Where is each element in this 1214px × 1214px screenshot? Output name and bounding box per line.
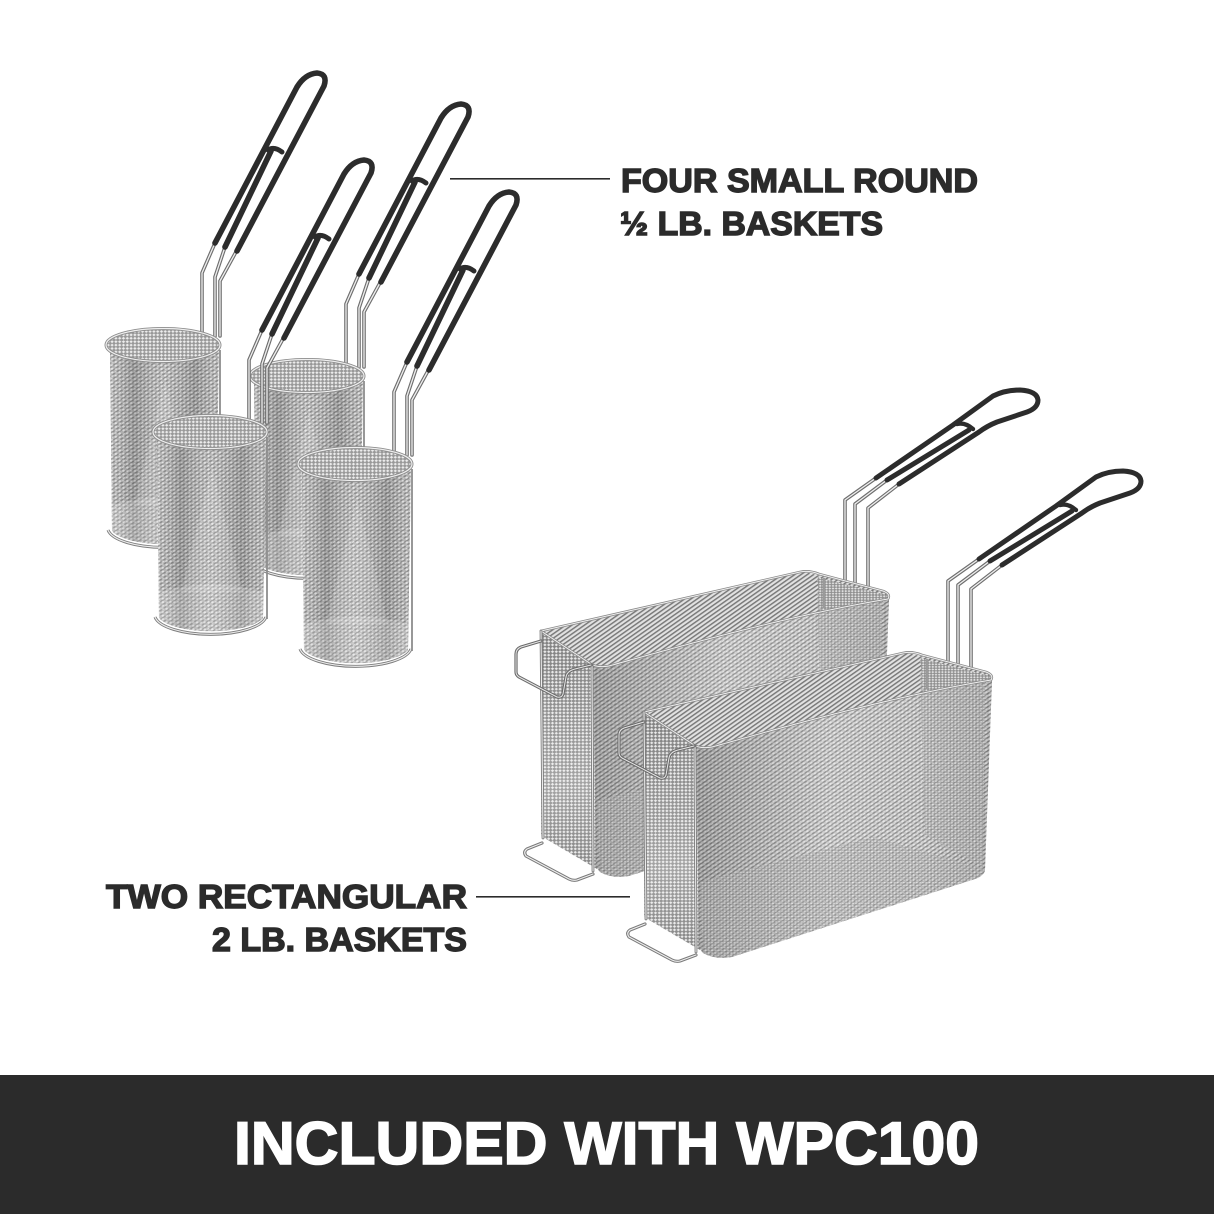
front rectangular basket — [619, 471, 1141, 961]
callout: rectangular baskets: TWO RECTANGULAR — [106, 878, 467, 915]
callout: round baskets: ½ LB. BASKETS — [620, 205, 883, 242]
handle — [346, 104, 469, 367]
callout: rectangular baskets — [106, 878, 467, 958]
leader line: rectangular baskets — [476, 896, 630, 898]
image: two rectangular baskets — [516, 390, 1141, 961]
back rectangular basket — [516, 390, 1038, 880]
mesh body — [153, 416, 267, 634]
handle — [394, 192, 517, 455]
footer band — [0, 1075, 1214, 1214]
leader line: round baskets — [450, 178, 610, 180]
footer title: INCLUDED WITH WPC100 — [234, 1110, 979, 1177]
back-left round basket — [106, 73, 325, 547]
mesh body — [619, 652, 992, 961]
callout: round baskets: FOUR SMALL ROUND — [621, 162, 978, 199]
mesh body — [106, 328, 220, 547]
front-left round basket — [153, 160, 372, 634]
handle — [202, 73, 325, 336]
mesh body — [250, 360, 364, 578]
handle — [249, 160, 372, 423]
back-right round basket — [250, 104, 469, 578]
handle — [948, 471, 1141, 670]
callout: round baskets — [620, 162, 978, 242]
handle — [845, 390, 1038, 589]
mesh body — [298, 448, 412, 666]
image: four small round baskets — [106, 73, 517, 666]
mesh body — [516, 571, 889, 880]
front-right round basket — [298, 192, 517, 666]
callout: rectangular baskets: 2 LB. BASKETS — [212, 921, 467, 958]
